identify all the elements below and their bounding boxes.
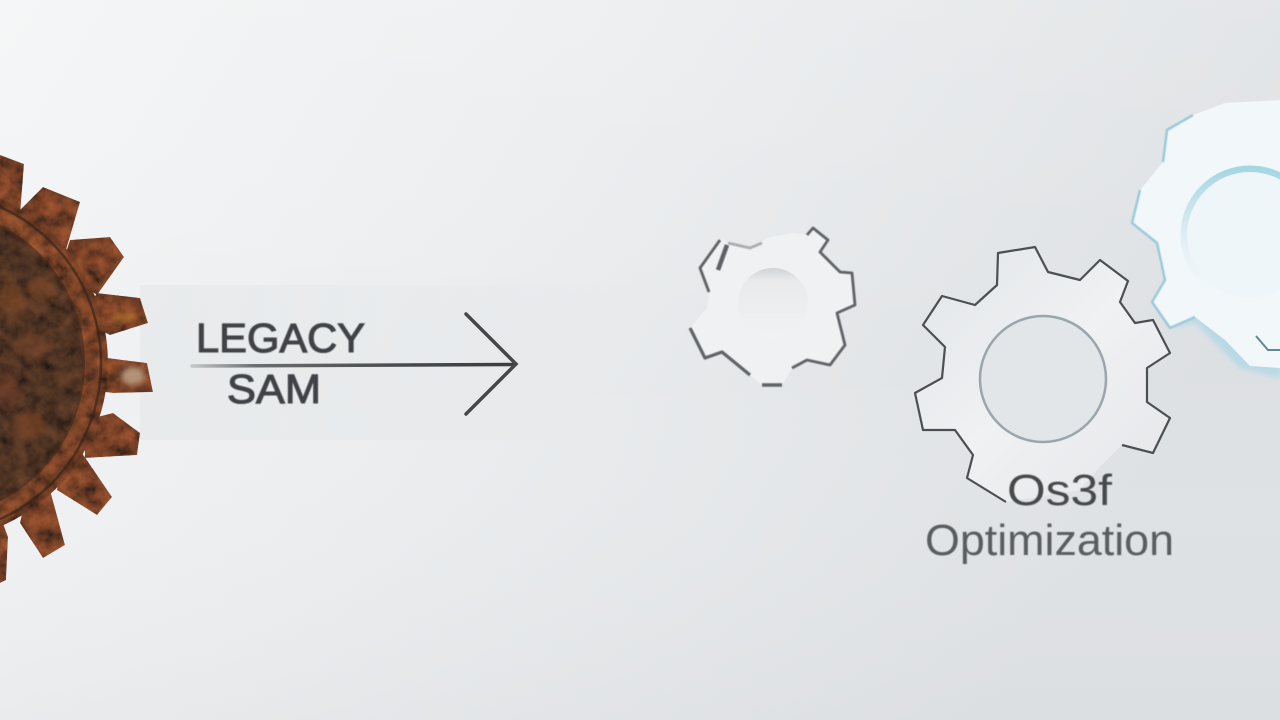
icon: blue glass gear — [1132, 100, 1280, 378]
small gear hub — [738, 268, 808, 338]
gear hub — [0, 210, 83, 516]
blue gear hub — [1184, 169, 1280, 301]
label: SAM: SAM — [227, 366, 321, 412]
gear hub — [980, 316, 1106, 442]
label: Os3f: Os3f — [1007, 466, 1113, 515]
icon: small silver gear — [690, 228, 855, 385]
blue glow — [1170, 300, 1280, 378]
icon: outlined gear — [915, 247, 1170, 502]
highlight band behind arrow — [140, 285, 610, 440]
blue gear lower tooth outline — [1256, 336, 1280, 350]
label: LEGACY: LEGACY — [196, 315, 365, 361]
icon: rusty gear — [0, 155, 153, 583]
gear teeth — [0, 155, 153, 583]
blue gear edge — [1132, 115, 1195, 328]
rim shadow — [0, 192, 101, 534]
gear rim — [0, 192, 101, 534]
small gear broken outline — [690, 228, 855, 385]
gear outline — [915, 247, 1170, 502]
arrow — [192, 314, 516, 414]
rust highlights — [0, 280, 145, 437]
label: Optimization: Optimization — [925, 516, 1174, 565]
gear body — [0, 185, 108, 541]
